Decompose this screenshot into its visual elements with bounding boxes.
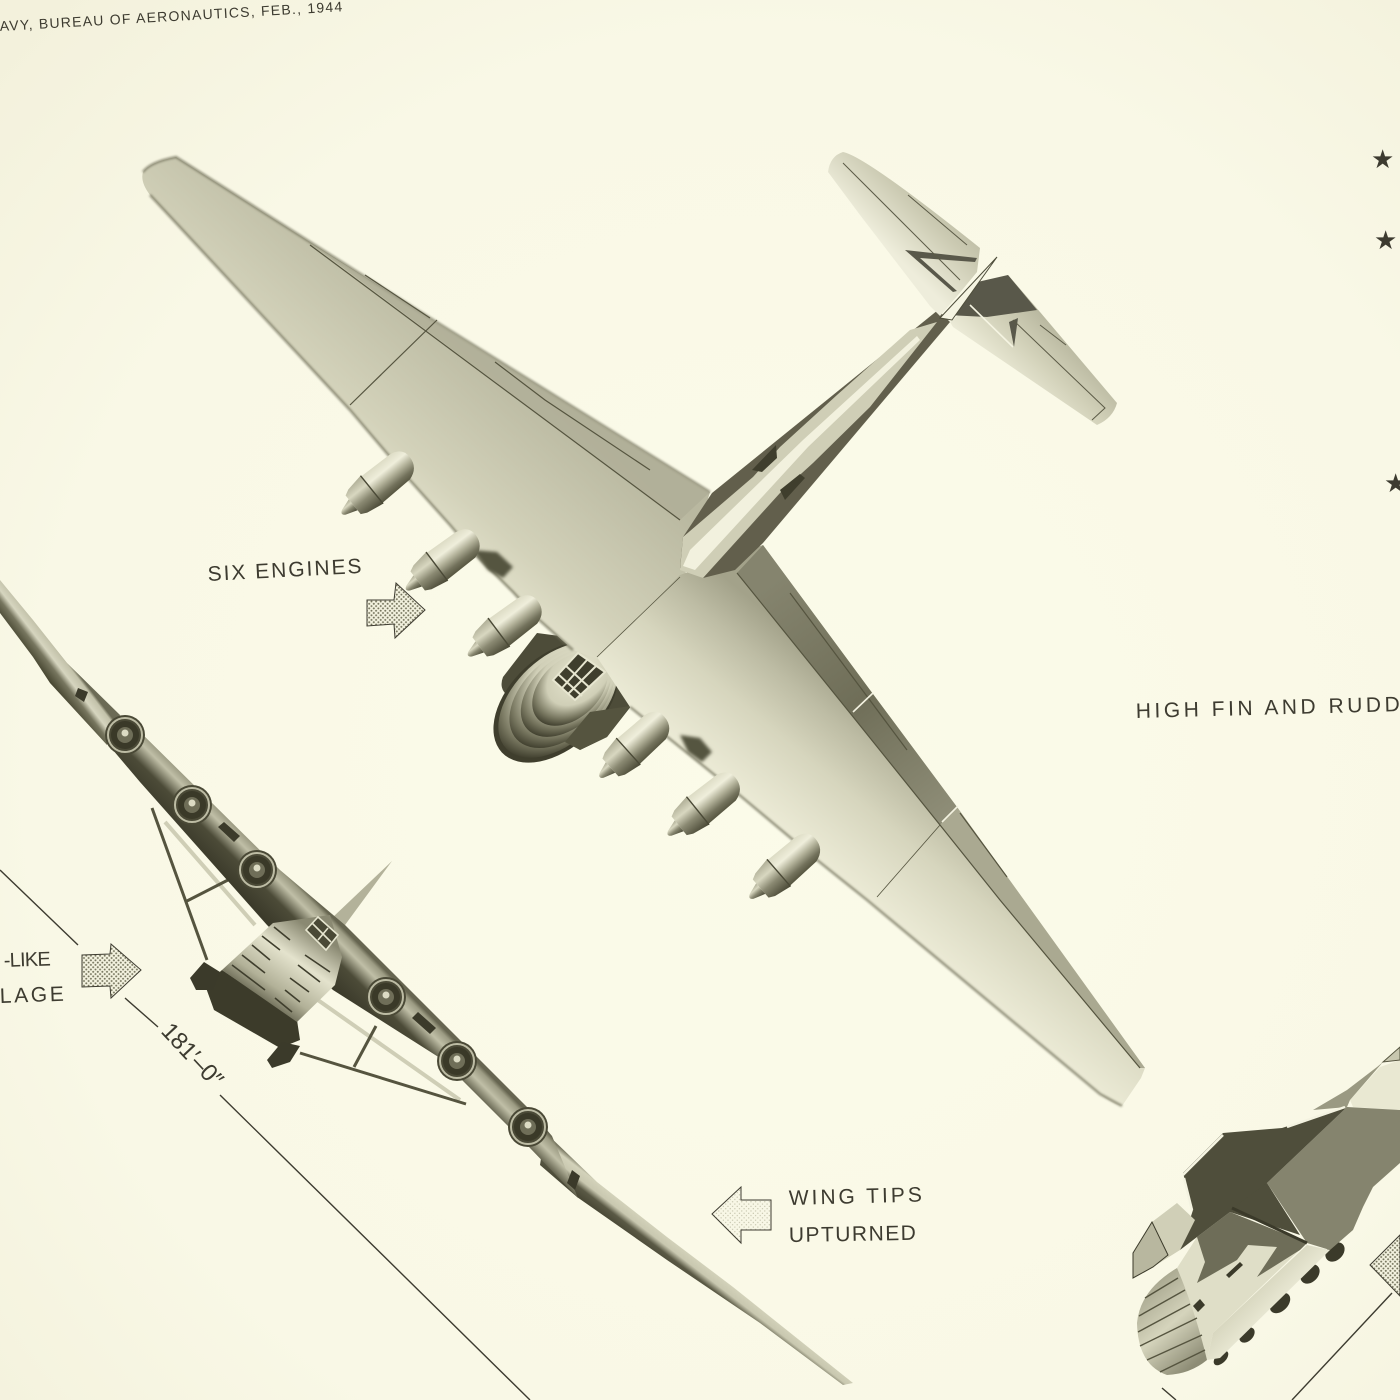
arrow: six engines bbox=[367, 583, 425, 638]
wing control surface lines bbox=[310, 245, 1140, 1068]
camouflage on forward fuselage bbox=[1197, 1212, 1307, 1283]
wing floats bbox=[190, 962, 300, 1068]
icon: stars: ★ bbox=[1374, 226, 1397, 256]
label: wing tips upturned bbox=[789, 1184, 922, 1247]
engines on the right wing bbox=[588, 705, 828, 912]
fuselage highlight bbox=[683, 336, 920, 570]
lower hull steps bbox=[1211, 1239, 1348, 1368]
left wing panel bbox=[142, 157, 710, 660]
forward fuselage bbox=[1177, 1212, 1307, 1360]
icon: stars bbox=[1371, 145, 1400, 499]
left aileron and flap strip bbox=[310, 243, 710, 520]
label: hull-like fuselage: -LIKE bbox=[3, 948, 51, 972]
hull seen from above bbox=[471, 618, 641, 786]
white gaps on the flaps bbox=[853, 693, 958, 822]
tailplane hinge lines bbox=[843, 163, 1105, 420]
bow planking bbox=[1138, 1278, 1205, 1372]
left outer wing bbox=[0, 580, 120, 745]
tailplane bbox=[828, 152, 1117, 425]
main wing bbox=[142, 157, 1145, 1106]
right flap strip bbox=[737, 545, 957, 825]
arrow: wing tips bbox=[712, 1187, 771, 1243]
hatched bow bbox=[1137, 1268, 1207, 1375]
icon: stars: ★ bbox=[1371, 145, 1394, 175]
top edge grey band bbox=[1313, 1062, 1383, 1110]
rear fuselage light section bbox=[1350, 1060, 1400, 1110]
hull underside bbox=[205, 970, 300, 1048]
fin base bbox=[1383, 1047, 1400, 1062]
mid fuselage bbox=[1267, 1107, 1400, 1250]
hatch marks bbox=[1193, 1262, 1243, 1312]
span value: 181′–0″ bbox=[156, 1018, 229, 1094]
label: six engines: SIX ENGINES bbox=[207, 555, 362, 586]
rear fuselage bbox=[680, 310, 950, 578]
fin behind wing bbox=[332, 861, 392, 925]
fuselage sponson marks bbox=[752, 445, 805, 500]
outboard engine bbox=[1133, 1203, 1195, 1278]
ribbed hull bbox=[222, 915, 342, 1022]
plane: front view bbox=[0, 580, 853, 1385]
fin edge-on bbox=[940, 257, 997, 320]
label: hull-like fuselage bbox=[0, 948, 64, 1008]
engines with propellers bbox=[105, 715, 548, 1147]
cockpit bbox=[306, 917, 338, 950]
engines on the left wing bbox=[331, 444, 550, 670]
label: wing tips upturned: UPTURNED bbox=[789, 1222, 916, 1247]
plane: three-quarter view bbox=[1133, 1047, 1400, 1375]
right outer wing bbox=[540, 1132, 853, 1385]
dimension line: span bbox=[0, 870, 530, 1400]
bow windows bbox=[553, 653, 605, 700]
arrow: fuselage bbox=[82, 944, 141, 998]
wing root shadow bbox=[1180, 1183, 1300, 1250]
right aileron strip bbox=[940, 807, 1145, 1068]
label: high fin and rudder: HIGH FIN AND RUDD bbox=[1136, 693, 1400, 723]
fuselage lit band bbox=[680, 322, 937, 578]
hull ribs bbox=[232, 927, 330, 1012]
leading edge shading bbox=[143, 157, 1122, 1106]
engine radiator blocks bbox=[473, 550, 712, 762]
pale rear struts and tailplane bbox=[165, 822, 460, 1100]
label: wing tips upturned: WING TIPS bbox=[789, 1184, 922, 1210]
fuselage dark base bbox=[680, 310, 950, 578]
arrow: three-quarter view bbox=[1370, 1235, 1400, 1296]
wing centre section bbox=[107, 713, 578, 1198]
wing slots bbox=[218, 822, 436, 1034]
fin brace bbox=[970, 305, 1013, 347]
plane: top-down view bbox=[142, 152, 1145, 1106]
dimension line: three-quarter view bbox=[1162, 1293, 1392, 1400]
wing highlights bbox=[1183, 1107, 1345, 1210]
wing root seam bbox=[1232, 1208, 1307, 1243]
wing struts bbox=[152, 808, 466, 1104]
light underside strip bbox=[1207, 1245, 1330, 1360]
fin shadow on tailplane bbox=[947, 275, 1037, 317]
wing break marks bbox=[75, 688, 580, 1190]
label: hull-like fuselage: LAGE bbox=[0, 983, 64, 1008]
wing bbox=[1183, 1107, 1347, 1210]
right wing panel bbox=[597, 545, 1145, 1106]
